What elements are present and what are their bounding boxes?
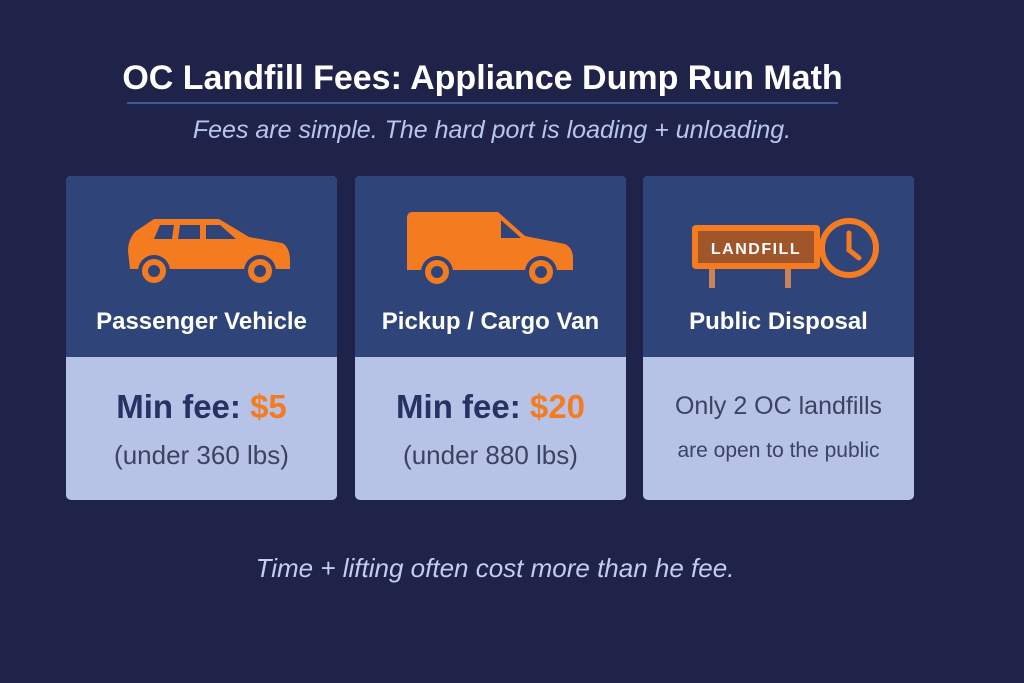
- panel: public disposal: Only 2 OC landfills: [675, 392, 882, 420]
- panel: passenger vehicle: (under 360 lbs): [114, 440, 289, 470]
- icon: landfill sign with clock: LANDFILL: [711, 241, 801, 258]
- panel: pickup van: [355, 176, 626, 500]
- footer note: Time + lifting often cost more than he fee.: [256, 553, 734, 583]
- icon: landfill sign with clock: [692, 218, 879, 288]
- icon: car: [128, 219, 290, 283]
- panel: passenger vehicle: Min fee: $5: [116, 388, 287, 425]
- title: OC Landfill Fees: Appliance Dump Run Math: [122, 59, 843, 97]
- panel: passenger vehicle: Passenger Vehicle: [96, 308, 307, 335]
- panel: public disposal: Public Disposal: [689, 308, 868, 335]
- panel: public disposal: are open to the public: [678, 439, 879, 462]
- icon: van: [407, 212, 573, 284]
- subtitle: Fees are simple. The hard port is loading + unloading.: [193, 116, 791, 144]
- panel: pickup van: Min fee: $20: [396, 388, 585, 425]
- panel: passenger vehicle: [66, 176, 337, 500]
- panel: pickup van: Pickup / Cargo Van: [382, 308, 599, 335]
- panel: pickup van: (under 880 lbs): [403, 440, 578, 470]
- panel: public disposal: [643, 176, 914, 500]
- title underline: [127, 102, 838, 104]
